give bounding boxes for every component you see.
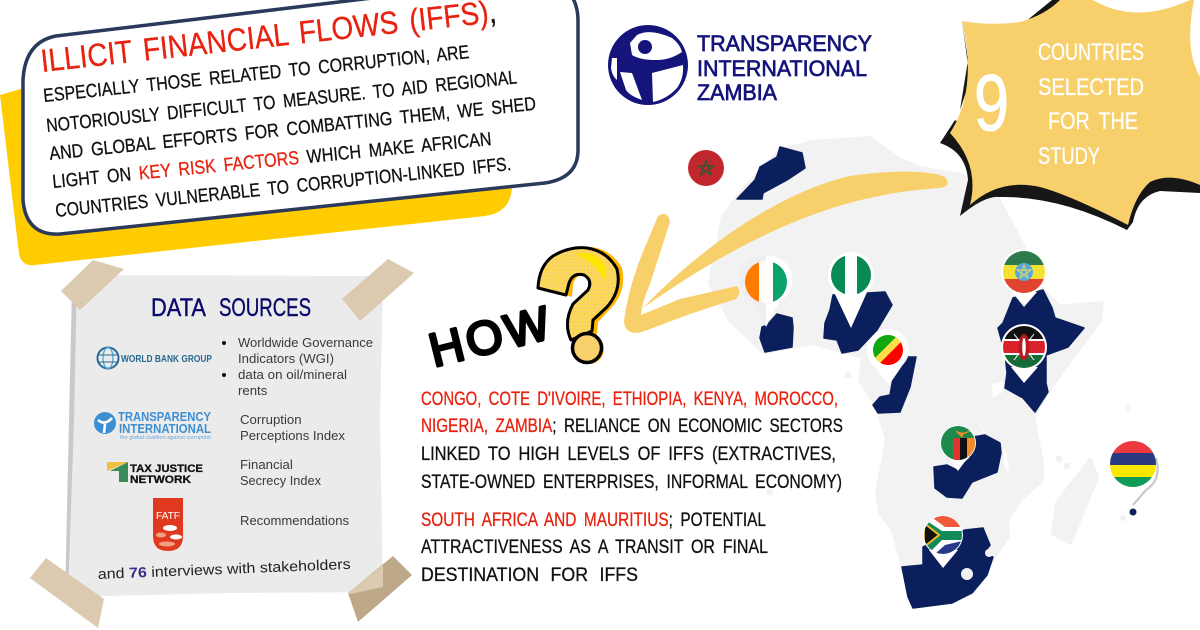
text block: how explanation: CONGO, COTE D'IVOIRE, ETHIOPIA, KENYA, MOROCCO,: [421, 389, 838, 410]
map: continent silhouette: [710, 138, 1132, 607]
intro text: COUNTRIES VULNERABLE TO CORRUPTION-LINKED IFFS.: [54, 154, 512, 222]
pin: Congo: [867, 329, 909, 385]
country: Cote d'Ivoire: [760, 314, 793, 352]
country: Zambia: [934, 435, 1001, 498]
pin: Mauritius: [1110, 441, 1158, 516]
country: Morocco: [737, 147, 805, 199]
text block: how explanation: STATE-OWNED ENTERPRISES, INFORMAL ECONOMY): [421, 472, 842, 493]
map: lakes: [978, 382, 1009, 474]
intro text: [42, 42, 537, 222]
text block: how explanation: ATTRACTIVENESS AS A TRANSIT OR FINAL: [421, 537, 768, 558]
sources: FSI: Secrecy Index: [240, 473, 321, 488]
logo wordmark: ZAMBIA: [697, 80, 777, 105]
sources: FATF: Recommendations: [240, 513, 349, 528]
logo: Tax Justice Network: NETWORK: [130, 474, 191, 486]
heading: How: HOW: [424, 296, 555, 377]
logo wordmark: TRANSPARENCY: [697, 31, 872, 56]
text block: how explanation: SOUTH AFRICA AND MAURITIUS; POTENTIAL: [421, 510, 766, 531]
country: Ethiopia and Kenya: [998, 290, 1084, 412]
pin: Ethiopia: [1001, 249, 1047, 307]
heading: DATA: [151, 294, 206, 322]
burst text: [1038, 39, 1144, 170]
map: highlighted countries: [737, 147, 1084, 608]
sources: World Bank indicators: Worldwide Governance: [238, 335, 373, 350]
burst shadow: [940, 0, 1200, 230]
burst text: COUNTRIES: [1038, 39, 1144, 66]
panel: Africa map: [710, 138, 1132, 608]
logo: FATF: FATF: [156, 510, 180, 522]
heading: [151, 294, 311, 322]
logo: World Bank Group: WORLD BANK GROUP: [121, 353, 212, 365]
intro text: NOTORIOUSLY DIFFICULT TO MEASURE. TO AID REGIONAL: [45, 67, 518, 137]
icon: question mark: [538, 247, 623, 364]
logo: Tax Justice Network: [107, 462, 203, 486]
logo: Transparency International: INTERNATIONAL: [119, 421, 211, 436]
intro text: LIGHT ON KEY RISK FACTORS WHICH MAKE AFRICAN: [51, 129, 492, 193]
logo: Transparency International: TRANSPARENCY: [118, 409, 211, 424]
sources: FSI: Financial: [240, 457, 293, 472]
heading: SOURCES: [219, 294, 311, 322]
logo: World Bank Group: [98, 348, 212, 368]
logo: Transparency International: [94, 409, 211, 441]
pins: country flags: [688, 150, 1158, 568]
sources: World Bank indicators: rents: [238, 383, 268, 398]
panel: data sources note: [30, 259, 414, 628]
card outline: [23, 0, 578, 234]
sources: CPI: Corruption: [240, 412, 302, 427]
panel: 9 countries burst: [940, 0, 1200, 230]
sources: CPI: Perceptions Index: [240, 428, 345, 443]
pin: Kenya: [1001, 324, 1047, 383]
logo: Transparency International Zambia: [608, 25, 872, 105]
text block: how explanation: LINKED TO HIGH LEVELS OF IFFS (EXTRACTIVES,: [421, 444, 836, 465]
callout: yellow backing card: [0, 60, 512, 265]
interviews line: and 76 interviews with stakeholders: [98, 557, 351, 583]
pin: Nigeria: [828, 252, 874, 328]
logo: Transparency International: the global coalition against corruption: [120, 435, 211, 441]
sources: World Bank indicators: data on oil/mineral: [238, 367, 347, 382]
pin: Zambia: [940, 425, 976, 471]
pin: Cote d'Ivoire: [745, 256, 792, 327]
sources: World Bank indicators: [222, 335, 373, 398]
sources: World Bank indicators: Indicators (WGI): [238, 351, 334, 366]
logo wordmark: INTERNATIONAL: [697, 56, 867, 81]
number 9: 9: [974, 58, 1009, 147]
intro text: AND GLOBAL EFFORTS FOR COMBATTING THEM, WE SHED: [48, 94, 537, 165]
sources: CPI: [240, 412, 345, 443]
logo: FATF: [153, 498, 183, 551]
tape: corners: [30, 259, 414, 628]
sources: FSI: [240, 457, 321, 488]
intro text: ESPECIALLY THOSE RELATED TO CORRUPTION, ARE: [42, 42, 470, 107]
burst text: FOR THE: [1048, 108, 1138, 135]
arrow: from burst to How: [624, 172, 948, 333]
pin: South Africa: [923, 515, 963, 568]
country: South Africa: [902, 528, 993, 608]
icon: TI globe: [608, 25, 688, 105]
burst text: SELECTED: [1038, 74, 1144, 101]
logo: Tax Justice Network: TAX JUSTICE: [130, 463, 203, 475]
text block: how explanation: [421, 389, 843, 586]
logo wordmark: [697, 31, 872, 105]
paper: [65, 275, 77, 598]
country: Nigeria: [824, 292, 892, 353]
country: Congo: [873, 357, 916, 413]
text block: how explanation: DESTINATION FOR IFFS: [421, 565, 638, 586]
panel: intro card: [23, 0, 578, 234]
burst body: [950, 0, 1200, 225]
flag: Morocco: [688, 150, 724, 186]
burst text: STUDY: [1038, 143, 1100, 170]
text block: how explanation: NIGERIA, ZAMBIA; RELIANCE ON ECONOMIC SECTORS: [421, 416, 843, 437]
